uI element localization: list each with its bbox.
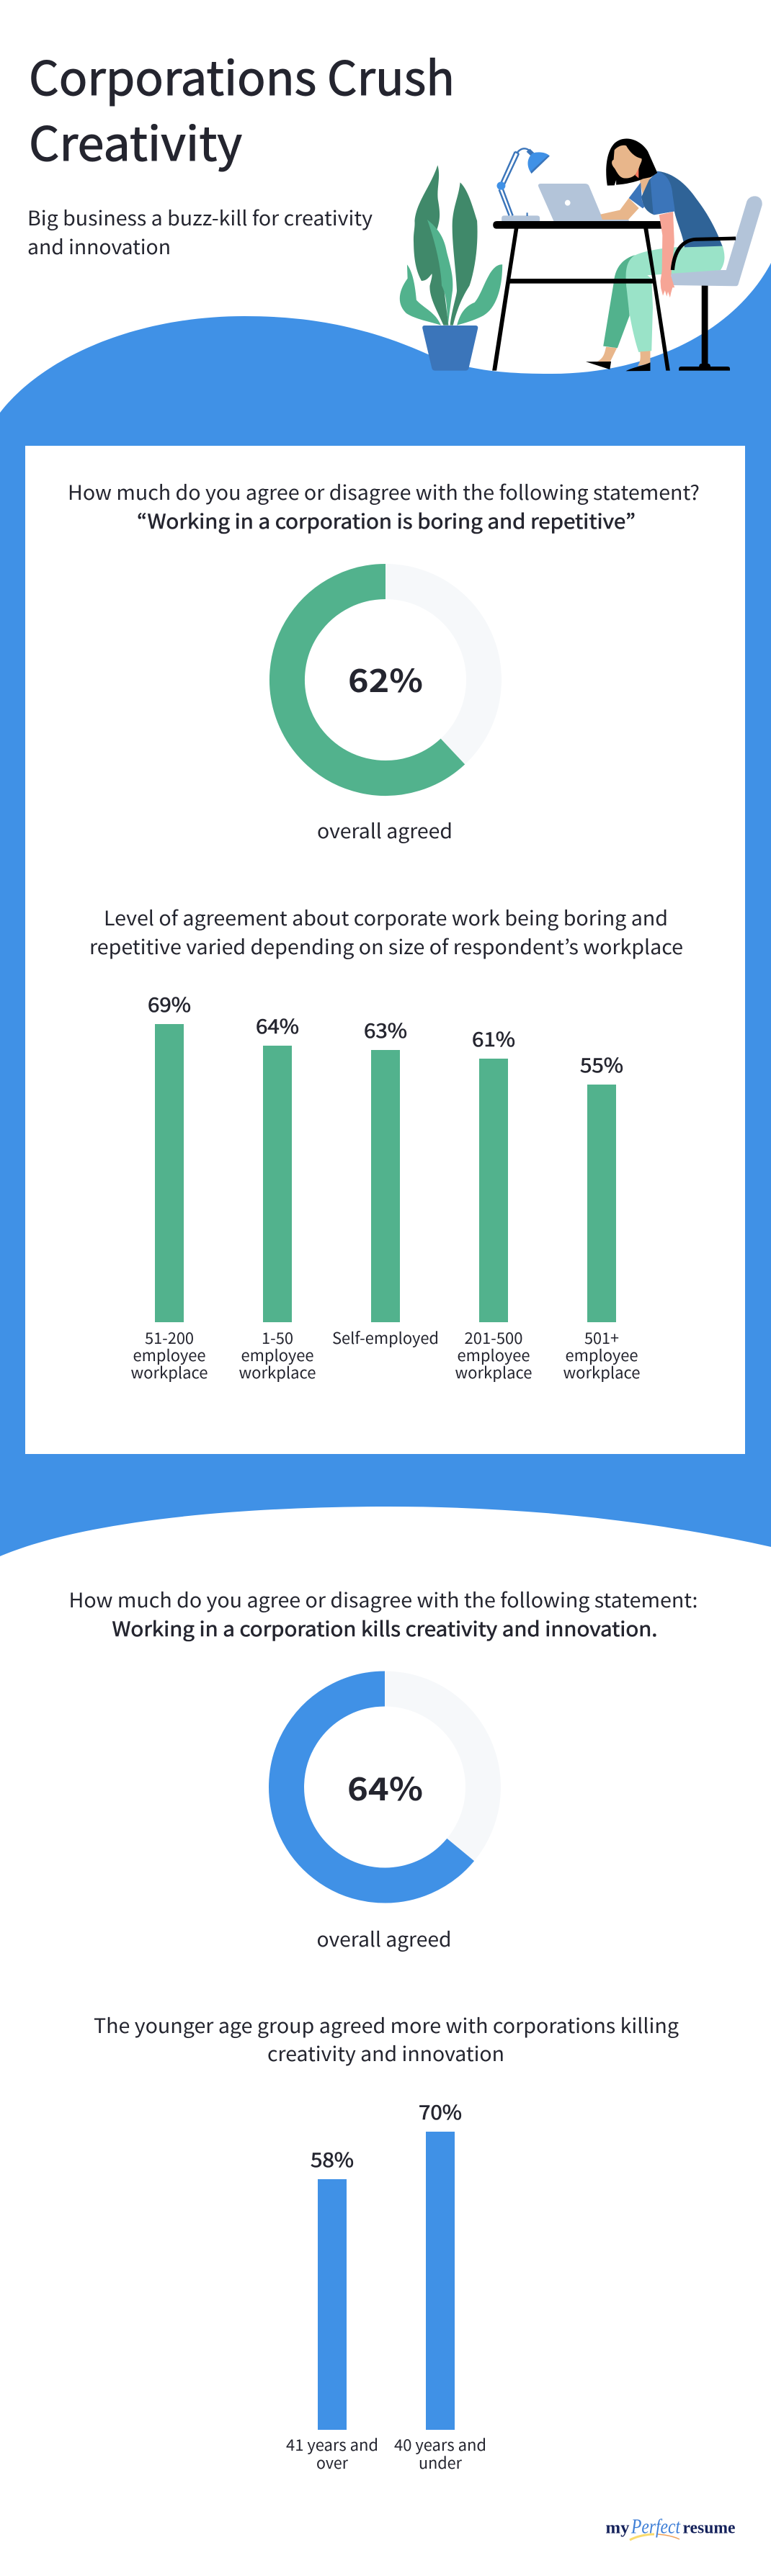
bar: 1-50 employee workplace: 1-50 xyxy=(262,1326,293,1349)
heading: age group xyxy=(94,2011,679,2068)
bar: self-employed xyxy=(332,1015,439,1349)
bar: 201-500 employee workplace: employee xyxy=(457,1343,530,1366)
bar: 41 years and over xyxy=(286,2145,378,2474)
bar: 1-50 employee workplace: workplace xyxy=(239,1360,316,1383)
subtitle xyxy=(27,203,373,261)
bar: 51-200 employee workplace xyxy=(131,989,208,1383)
bar: 51-200 employee workplace: 69% xyxy=(148,989,191,1018)
bar: 41 years and over: over xyxy=(316,2451,348,2474)
bar: 51-200 employee workplace: 51-200 xyxy=(145,1326,194,1349)
bar chart: workplace size xyxy=(131,989,640,1383)
title xyxy=(29,41,455,174)
bar: 41 years and over: 58% xyxy=(311,2145,354,2173)
bar: self-employed: 63% xyxy=(364,1015,407,1044)
heading: age group: The younger age group agreed more with corporations killing xyxy=(94,2011,679,2039)
bar: 40 years and under: 40 years and xyxy=(394,2433,486,2456)
bar: 51-200 employee workplace: workplace xyxy=(131,1360,208,1383)
donut chart: 64%: 64% xyxy=(347,1764,423,1810)
heading: statement two: How much do you agree or disagree with the following statement: xyxy=(69,1585,698,1614)
icon: desk xyxy=(492,221,670,371)
illustration: woman slumped at desk with plant xyxy=(400,138,762,371)
heading: statement two: Working in a corporation kills creativity and innovation. xyxy=(112,1614,657,1643)
subtitle: and innovation xyxy=(27,232,171,261)
logo: myPerfectResume xyxy=(605,2515,736,2540)
bar chart: age group xyxy=(286,2097,486,2474)
bar: 201-500 employee workplace: workplace xyxy=(455,1360,532,1383)
heading: workplace size: repetitive varied depending on size of respondent’s workplace xyxy=(89,932,683,961)
bar: 1-50 employee workplace: 64% xyxy=(256,1011,299,1039)
bar: 201-500 employee workplace: 61% xyxy=(472,1024,515,1052)
heading: age group: creativity and innovation xyxy=(267,2039,504,2068)
heading: statement one: “Working in a corporation is boring and repetitive” xyxy=(137,506,636,535)
donut caption: overall agreed xyxy=(317,816,453,845)
blue wave background xyxy=(0,263,771,1556)
heading: statement two xyxy=(69,1585,698,1643)
icon: desk lamp xyxy=(496,148,550,221)
icon: office chair xyxy=(671,196,762,371)
bar: 501+ employee workplace xyxy=(563,1050,640,1383)
bar: self-employed: Self-employed xyxy=(332,1326,439,1349)
heading: workplace size: Level of agreement about corporate work being boring and xyxy=(104,903,668,932)
icon: potted plant xyxy=(400,165,502,371)
title: Corporations Crush xyxy=(29,41,455,109)
bar: 201-500 employee workplace: 201-500 xyxy=(464,1326,523,1349)
icon: woman xyxy=(586,138,724,371)
bar: 40 years and under xyxy=(394,2097,486,2474)
icon: laptop xyxy=(538,184,629,221)
bar: 501+ employee workplace: 501+ xyxy=(584,1326,619,1349)
logo: myPerfectResume: Perfect xyxy=(630,2515,681,2538)
bar: 1-50 employee workplace xyxy=(239,1011,316,1383)
bar: 501+ employee workplace: employee xyxy=(565,1343,638,1366)
donut chart: 62% xyxy=(287,582,484,778)
bar: 501+ employee workplace: 55% xyxy=(580,1050,623,1078)
bar: 41 years and over: 41 years and xyxy=(286,2433,378,2456)
icon: dangling arm xyxy=(659,212,736,297)
heading: statement one: How much do you agree or disagree with the following statement? xyxy=(68,477,700,506)
bar: 51-200 employee workplace: employee xyxy=(133,1343,206,1366)
subtitle: Big business a buzz-kill for creativity xyxy=(27,203,373,232)
title: Creativity xyxy=(29,107,242,174)
bar: 501+ employee workplace: workplace xyxy=(563,1360,640,1383)
heading: workplace size xyxy=(89,903,683,961)
logo: myPerfectResume: my xyxy=(605,2519,630,2538)
donut caption: overall agreed xyxy=(317,1924,451,1953)
bar: 40 years and under: under xyxy=(419,2451,462,2474)
bar: 1-50 employee workplace: employee xyxy=(241,1343,314,1366)
panel: white card xyxy=(25,446,745,1454)
logo: myPerfectResume: resume xyxy=(683,2519,736,2538)
donut chart: 64% xyxy=(287,1689,483,1885)
donut chart: 62%: 62% xyxy=(348,655,423,701)
heading: statement one xyxy=(68,477,700,535)
bar: 40 years and under: 70% xyxy=(419,2097,462,2125)
bar: 201-500 employee workplace xyxy=(455,1024,532,1383)
